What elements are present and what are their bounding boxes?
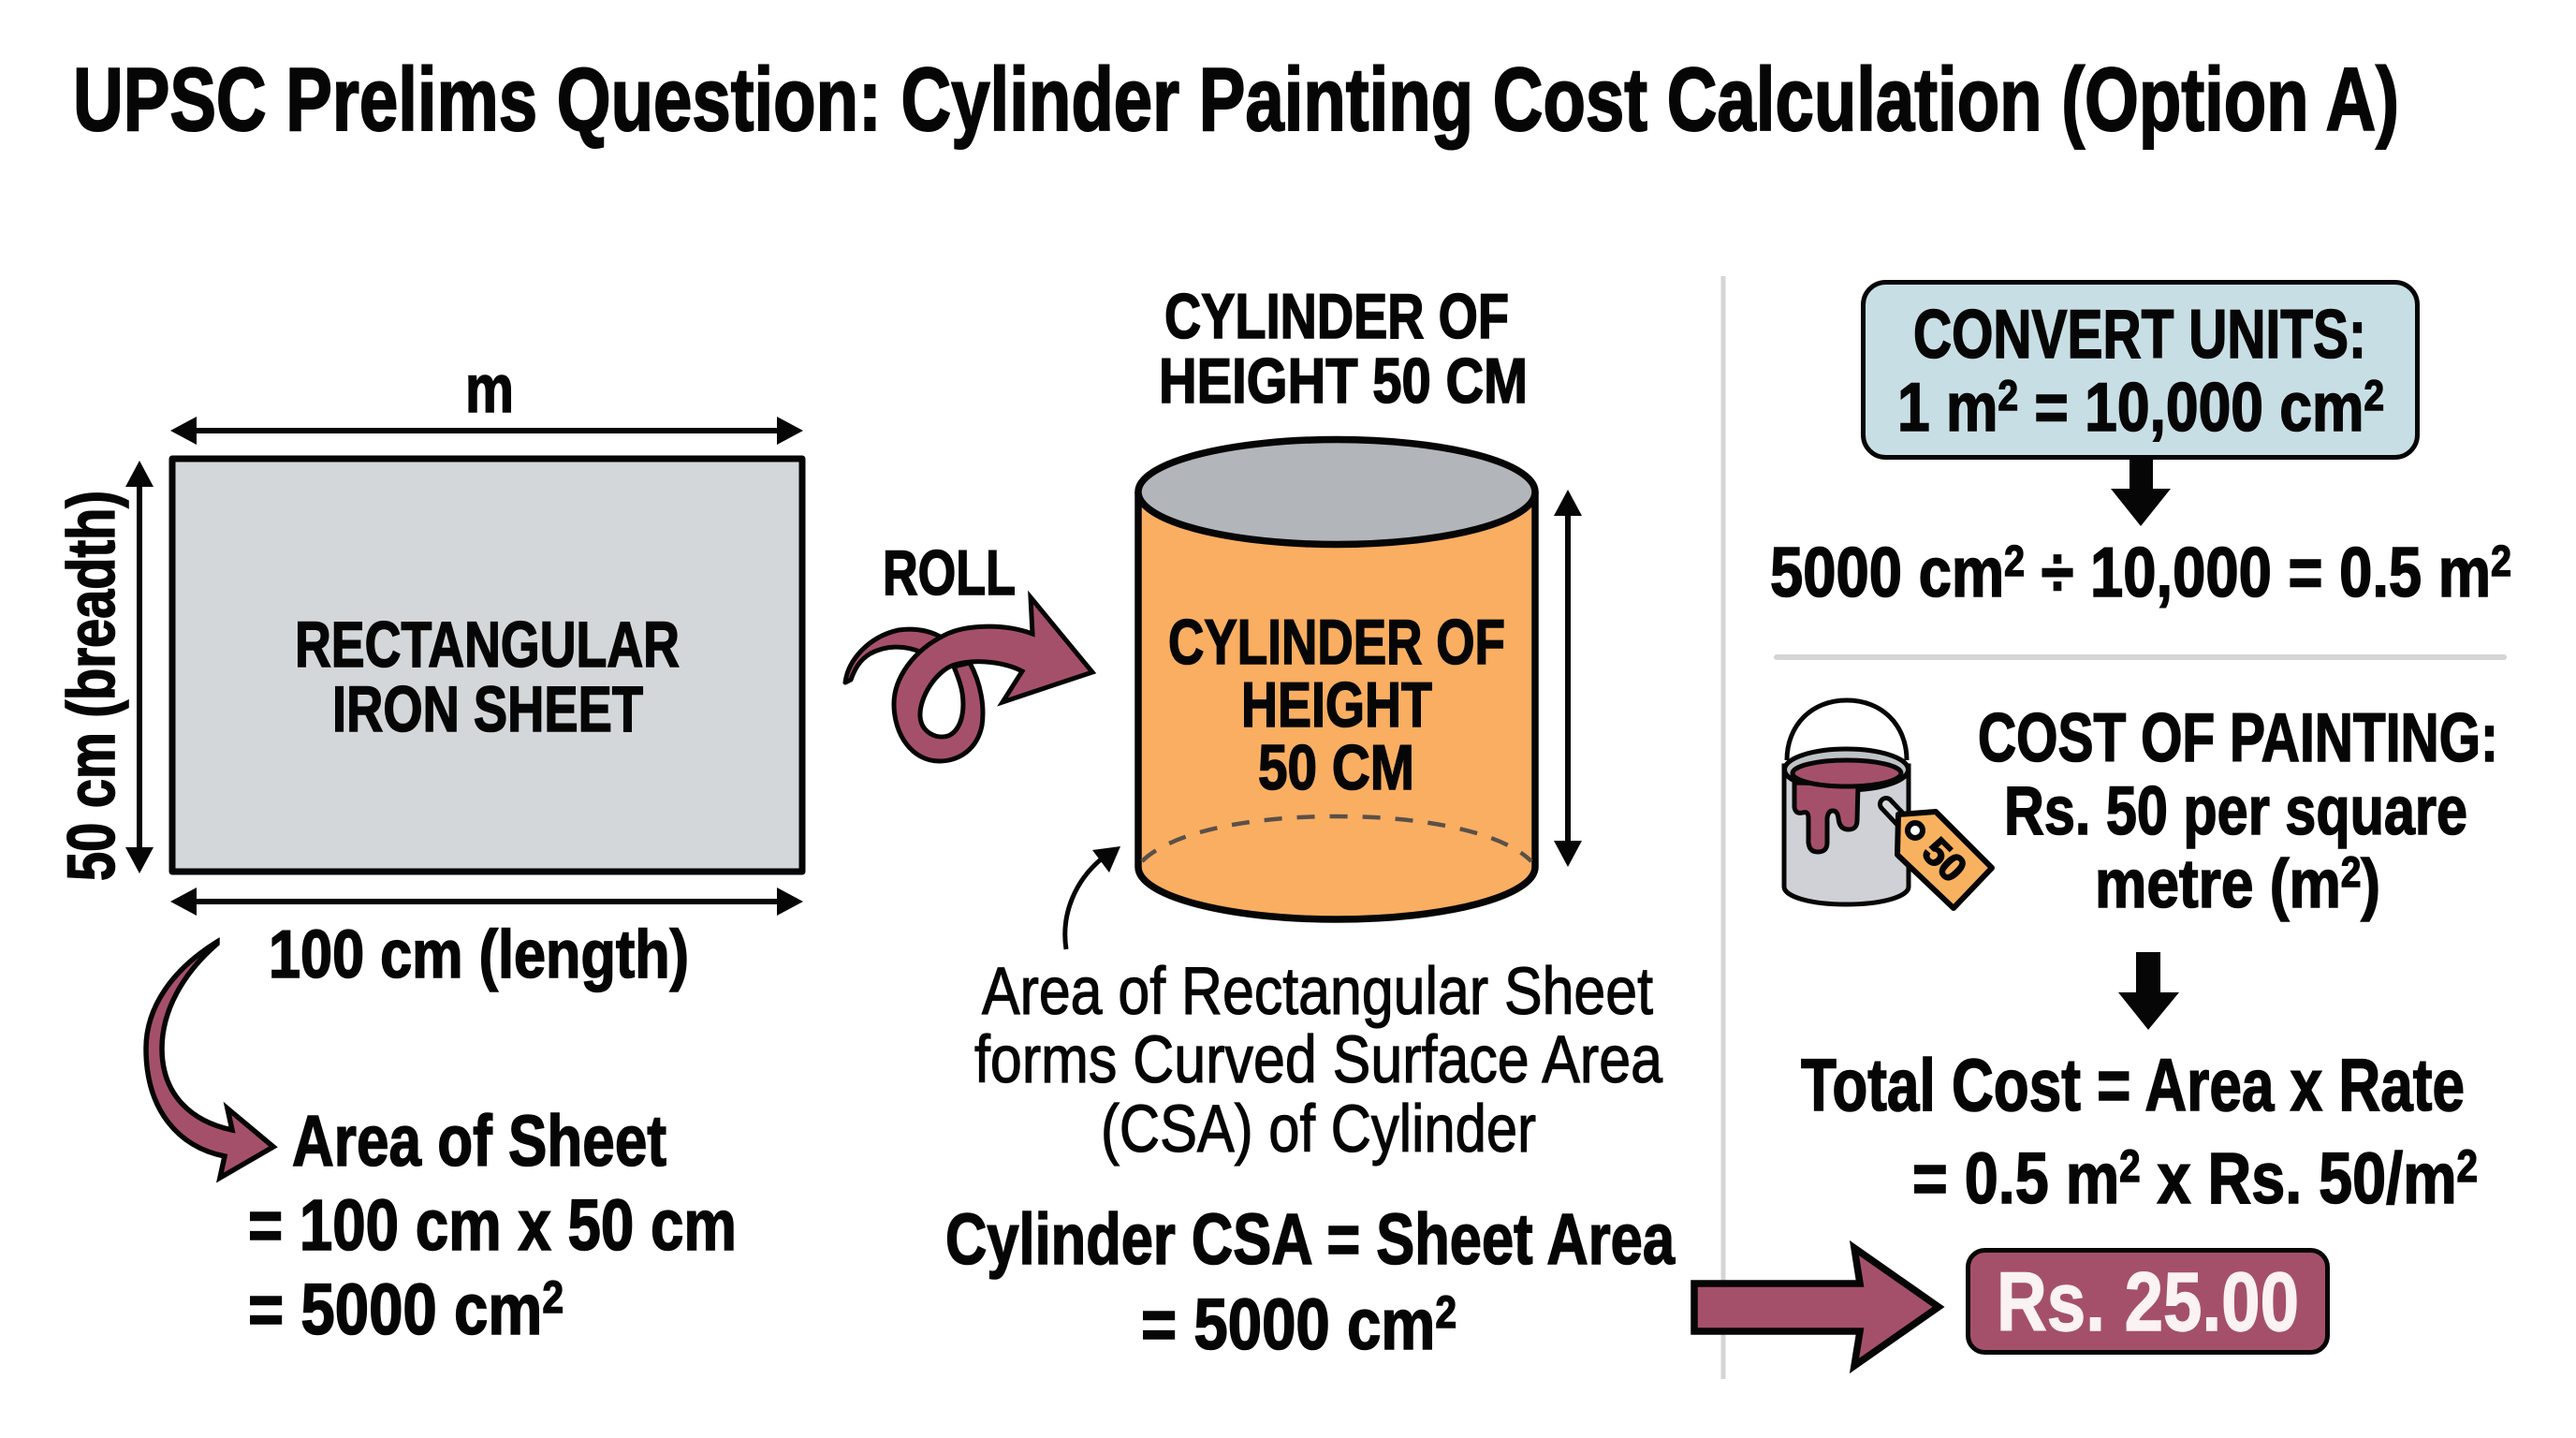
cylinder area formula: = 5000 cm	[1141, 1284, 1487, 1365]
label: m: m	[465, 352, 514, 427]
arrow: curved to area	[146, 942, 273, 1178]
conversion result: ÷ 10,000 = 0.5 m	[2025, 533, 2491, 611]
panel: cylinder	[945, 281, 1676, 1365]
cylinder body label: HEIGHT	[1241, 669, 1432, 741]
conversion result: 2	[2491, 536, 2511, 585]
cylinder body label: CYLINDER OF	[1168, 607, 1505, 678]
sheet label: IRON SHEET	[332, 673, 643, 745]
cylinder drawing	[1138, 440, 1535, 919]
sheet label: RECTANGULAR	[295, 609, 680, 681]
total cost formula: 2	[2457, 1142, 2478, 1192]
cylinder body label: 50 CM	[1258, 732, 1414, 803]
area calculation: Area of Sheet	[292, 1101, 666, 1181]
cylinder area formula: Cylinder CSA = Sheet Area	[945, 1199, 1676, 1280]
explanation text	[974, 955, 1662, 1167]
callout: convert units: = 10,000 cm	[2018, 370, 2364, 446]
arrow: length	[170, 888, 803, 916]
total cost formula: 2	[2119, 1142, 2141, 1192]
panel: unit conversion	[1770, 283, 2511, 611]
label: breadth: 50 cm (breadth)	[55, 491, 129, 881]
total cost formula: x Rs. 50/m	[2141, 1138, 2457, 1219]
label: length: 100 cm (length)	[269, 917, 689, 992]
callout: convert units: 2	[2364, 372, 2384, 419]
panel: cost of painting	[1694, 700, 2498, 1366]
explanation text: Area of Rectangular Sheet	[982, 955, 1653, 1029]
cost of painting text: 2	[2341, 848, 2361, 896]
area calculation: = 5000 cm	[248, 1269, 594, 1350]
explanation text: forms Curved Surface Area	[974, 1023, 1662, 1097]
arrow tail	[845, 629, 944, 682]
conversion result: 2	[2004, 536, 2025, 585]
panel: rectangular sheet and area	[55, 352, 803, 1350]
explanation text: (CSA) of Cylinder	[1101, 1093, 1536, 1167]
arrow: down to conversion	[2111, 460, 2171, 526]
callout: convert units: 1 m	[1897, 370, 2015, 446]
panel: roll arrow	[845, 537, 1092, 761]
cost of painting text: metre (m	[2095, 846, 2383, 922]
cost of painting text: Rs. 50 per square	[2004, 773, 2467, 849]
total cost formula: = 0.5 m	[1912, 1138, 2159, 1219]
label: roll: ROLL	[883, 537, 1016, 609]
area calculation: = 100 cm x 50 cm	[248, 1185, 737, 1266]
arrow: large to result	[1694, 1248, 1939, 1366]
callout: convert units	[1863, 283, 2417, 457]
cylinder area formula: 2	[1435, 1288, 1456, 1338]
sheet rectangle	[172, 459, 802, 872]
result box: Rs. 25.00	[1997, 1255, 2299, 1348]
callout: convert units: 2	[1998, 372, 2018, 419]
area calculation	[248, 1101, 737, 1350]
cylinder heading: HEIGHT 50 CM	[1159, 345, 1528, 417]
cylinder area formula	[945, 1199, 1676, 1365]
arrow: down to total cost	[2118, 952, 2179, 1030]
divider: horizontal	[1774, 654, 2507, 660]
arrow: cylinder height	[1554, 490, 1582, 867]
arrow: top width	[170, 417, 803, 445]
icon: paint bucket with price tag	[1784, 700, 1992, 908]
cost of painting text: )	[2361, 846, 2380, 922]
sheet label	[295, 609, 680, 745]
arrow: breadth	[125, 461, 154, 873]
cylinder heading	[1159, 281, 1528, 417]
arrow loop and head	[894, 597, 1092, 761]
cost of painting text	[1978, 700, 2498, 922]
area calculation: 2	[542, 1273, 564, 1323]
total cost formula	[1801, 1043, 2478, 1219]
icon: paint bucket with price tag: 50	[1914, 829, 1976, 890]
conversion result: 5000 cm	[1770, 533, 2047, 611]
arrow: pointer to cylinder	[1065, 846, 1120, 949]
divider: vertical	[1720, 276, 1726, 1379]
callout: convert units: CONVERT UNITS:	[1913, 297, 2366, 373]
cylinder body label	[1168, 607, 1505, 803]
cylinder heading: CYLINDER OF	[1164, 281, 1509, 352]
